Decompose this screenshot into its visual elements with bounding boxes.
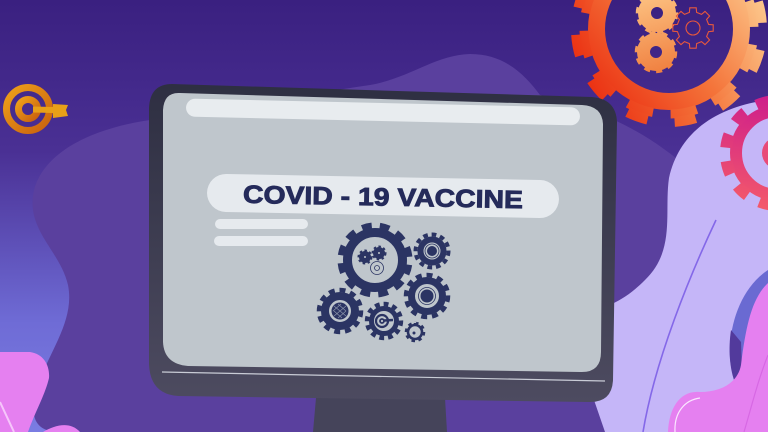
blue accent blob — [730, 270, 768, 380]
monitor base line — [162, 372, 605, 381]
lilac blob vein — [643, 220, 716, 432]
lower centre gear — [367, 304, 401, 338]
pink blob left highlight — [0, 402, 14, 432]
monitor stand — [313, 398, 447, 432]
screen top bar — [186, 99, 580, 125]
upper right gear — [416, 234, 448, 268]
middle right gear — [406, 275, 448, 317]
pink blob right — [668, 283, 768, 432]
gear cluster — [319, 222, 448, 341]
background blob — [33, 54, 700, 432]
icon: pink gear — [721, 96, 768, 210]
large gear — [337, 222, 413, 298]
pink blob left — [0, 352, 49, 432]
pink blob bottom — [43, 425, 80, 432]
monitor frame — [149, 84, 617, 402]
monitor screen — [163, 93, 603, 372]
lower left gear — [319, 290, 361, 332]
outline gear — [673, 8, 713, 48]
monitor — [149, 84, 617, 402]
text placeholder lines — [214, 219, 308, 246]
small gear — [406, 323, 424, 341]
lilac blob — [594, 100, 768, 432]
small peach gear bottom — [637, 33, 675, 71]
icon: target with arrow — [6, 88, 68, 130]
pink blob highlights — [675, 355, 768, 432]
title: COVID - 19 VACCINE — [243, 181, 523, 214]
small peach gear top — [638, 0, 676, 32]
dark accent blob — [730, 330, 742, 380]
icon: large orange gear — [557, 0, 768, 141]
title pill — [207, 174, 559, 218]
